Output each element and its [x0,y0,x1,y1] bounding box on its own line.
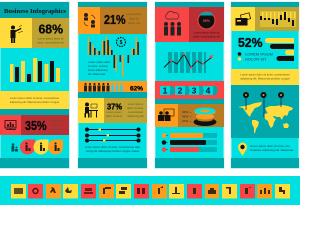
stat: 68 percent: Lorem ipsum dolor sit [38,36,64,40]
text block [250,144,294,152]
stat: 37 percent: Lorem ipsum [106,110,123,114]
legend: DOLOR SIT [245,56,267,62]
text block: tetuer adipiscing [88,68,108,72]
stat: 35 percent: dolor sit [52,123,62,127]
text block: Lorem ipsum dolor sit amet, consectetuer adip [85,145,141,149]
numbered arrow steps: 4 [206,86,211,96]
stat: 21 percent: amet, con [128,21,140,25]
stat: 37 percent: dolor sit amet, [127,106,144,110]
stat: 21 percent: Lorem ipsum [126,12,143,16]
text block: iscing elit. Maecenas porttitor congue massa [86,149,140,153]
text block: Lorem ipsum dolor sit amet, con [250,144,290,148]
icon: dollar ring [116,38,126,46]
text block: sectetuer adipiscing elit. Maecenas [250,148,294,152]
title: Business Infographics [4,9,67,15]
panel: statistics [78,2,147,168]
legend [238,52,273,62]
stat: 37 percent: 37% [107,102,122,112]
icon: wallet and cards [236,13,251,26]
panel: network and trend [155,2,224,168]
pictogram: people 62 percent [84,83,143,92]
legend: stacked rings: 21% — [182,119,192,123]
text block: amet, consectetuer ad [193,34,220,38]
stat: 68 percent [37,22,64,44]
text block [240,72,290,80]
icon: map pin [238,142,247,156]
text block: adipiscing elit. Maecenas porttitor congue [240,76,290,80]
candlestick chart [260,11,296,27]
stat: 68 percent: amet, consectetuer ad [37,40,64,44]
text block [85,145,141,153]
numbered arrow steps [160,86,218,96]
text block: Lorem ipsum dolor sit amet, consectetuer [10,96,59,100]
legend: LOREM IPSUM [245,52,273,56]
stat: 37 percent: consectetuer [128,110,143,114]
stat: 52 percent: 52% [238,35,263,50]
icon: presenter [10,25,23,43]
stat: 35 percent: 35% [25,118,47,133]
icon strip [0,176,300,205]
text block: Lorem ipsum dolor sit amet, consectetuer [240,72,290,76]
stat: 21 percent [104,12,143,27]
stat: 21 percent: dolor sit [129,16,139,20]
diverging bar chart [88,36,139,77]
numbered arrow steps: 3 [192,86,197,96]
rounded bars [265,38,294,61]
stat: 21 percent: 21% [104,13,126,27]
text block: elit. Maecenas [88,72,106,76]
panel: market and world map [231,2,299,168]
legend: stacked rings: 32% — [182,110,192,114]
legend: stacked rings [182,110,192,123]
icon: presentation board [5,120,16,130]
text block: sit amet, conseq [88,64,108,68]
panel: business infographics overview [0,2,70,168]
legend: stacked rings: 41% — [182,114,192,118]
text block: Lorem ipsum dolor [88,60,110,64]
numbered arrow steps: 2 [178,86,183,96]
stat: 35 percent: Lorem ipsum [49,119,66,123]
world map with pins [238,92,293,133]
pictogram: people 62 percent: 62% [130,86,143,92]
icon: cloud team [164,11,181,36]
text block [193,30,220,38]
stat: 37 percent: dolor sit amet [106,114,122,118]
icon: round badge [198,12,215,29]
numbered arrow steps: 1 [163,86,168,96]
line chart [164,52,213,73]
icon row: people [12,140,63,154]
icon: people exchange [84,13,95,28]
text block: Lorem ipsum dolor sit [194,30,220,34]
chart: stacked rings [194,108,216,126]
icon: dollar ring: $ [120,40,123,46]
stat: 37 percent [106,102,144,118]
slider chart [85,128,140,142]
horizontal progress bars [162,133,217,152]
icon: audience and screen [158,109,174,121]
text block: adipiscing elit. Maecenas porttitor congue [10,100,60,104]
text block [88,60,110,76]
bar chart [10,58,60,82]
stat: 35 percent: amet con [51,127,63,131]
icon: person at desk [84,102,98,118]
stat: 68 percent: 68% [38,22,63,36]
icon: round badge: 65% [203,19,211,23]
stat: 37 percent: adipiscing elit [127,114,144,118]
stat: 37 percent: Lorem ipsum [128,102,144,106]
stat: 35 percent [25,118,66,133]
text block [10,96,60,104]
